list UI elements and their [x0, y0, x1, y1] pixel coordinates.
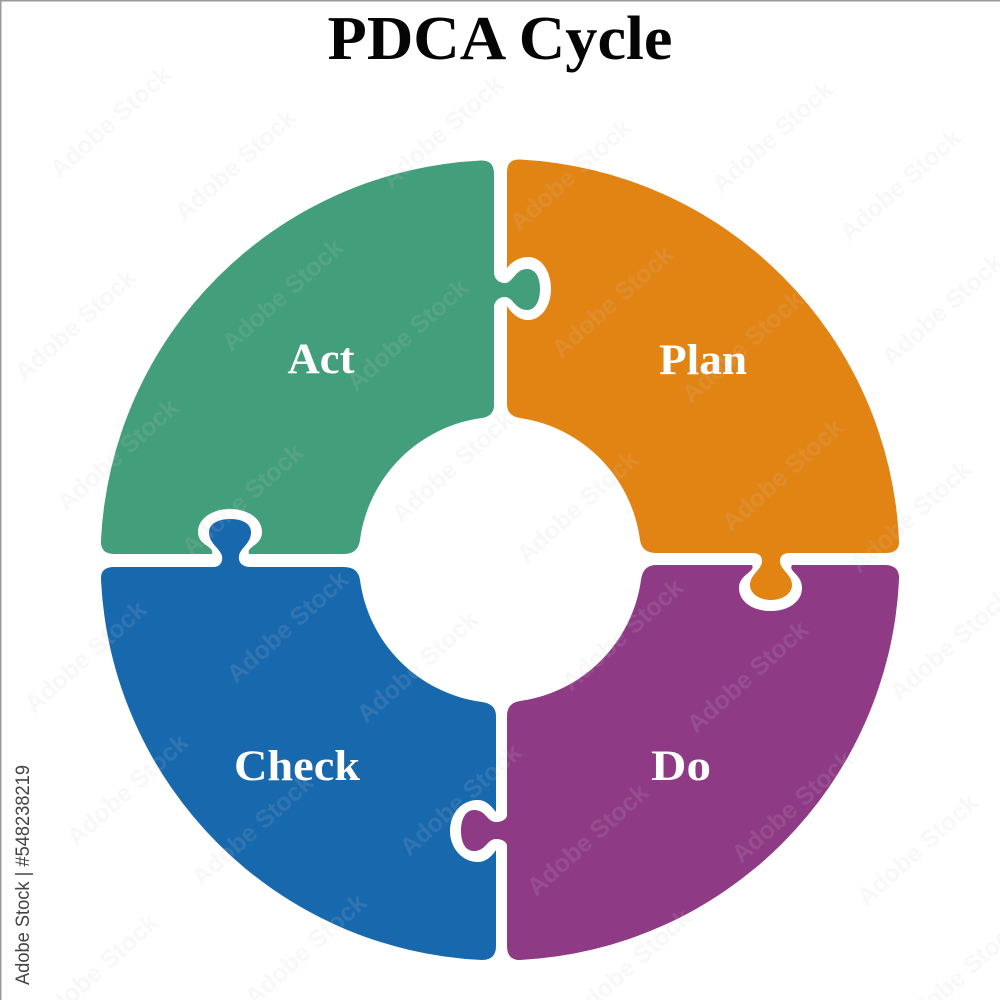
title: PDCA Cycle	[328, 5, 672, 73]
label: Do: Do	[651, 743, 711, 790]
watermark text: Adobe Stock	[727, 745, 859, 869]
watermark text: Adobe Stock	[222, 565, 354, 689]
label: Check: Check	[234, 743, 360, 790]
label: Plan: Plan	[659, 337, 747, 384]
stock image credit: Adobe Stock | #548238219	[12, 765, 34, 985]
watermark text: Adobe Stock	[170, 103, 302, 227]
watermark text: Adobe Stock	[45, 60, 177, 184]
panel: Do puzzle piece	[461, 565, 899, 960]
watermark text: Adobe Stock	[717, 413, 849, 537]
watermark text: Adobe Stock	[505, 113, 637, 237]
watermark text: Adobe Stock	[522, 778, 654, 902]
watermark text: Adobe Stock	[352, 605, 484, 729]
puzzle ring diagram	[101, 159, 899, 960]
panel: Check puzzle piece	[101, 519, 496, 960]
watermark text: Adobe Stock	[177, 438, 309, 562]
panel: Plan puzzle piece	[507, 159, 899, 600]
watermark text: Adobe Stock	[217, 233, 349, 357]
watermark text: Adobe Stock	[852, 788, 984, 912]
label: Act: Act	[288, 336, 355, 383]
watermark text: Adobe Stock	[395, 738, 527, 862]
watermark text: Adobe Stock	[677, 285, 809, 409]
watermark text: Adobe Stock	[707, 75, 839, 199]
watermark text: Adobe Stock	[52, 393, 184, 517]
watermark text: Adobe Stock	[835, 123, 967, 247]
watermark text: Adobe Stock	[20, 595, 152, 719]
watermark text: Adobe Stock	[10, 263, 142, 387]
watermark text: Adobe Stock	[342, 273, 474, 397]
watermark text: Adobe Stock	[845, 455, 977, 579]
watermark text: Adobe Stock	[377, 70, 509, 194]
watermark text: Adobe Stock	[512, 445, 644, 569]
watermark text: Adobe Stock	[62, 728, 194, 852]
watermark text: Adobe Stock	[547, 240, 679, 364]
watermark text: Adobe Stock	[187, 768, 319, 892]
watermark text: Adobe Stock	[387, 405, 519, 529]
panel: Act puzzle piece	[101, 160, 540, 554]
watermark text: Adobe Stock	[557, 573, 689, 697]
watermark text: Adobe Stock	[682, 615, 814, 739]
